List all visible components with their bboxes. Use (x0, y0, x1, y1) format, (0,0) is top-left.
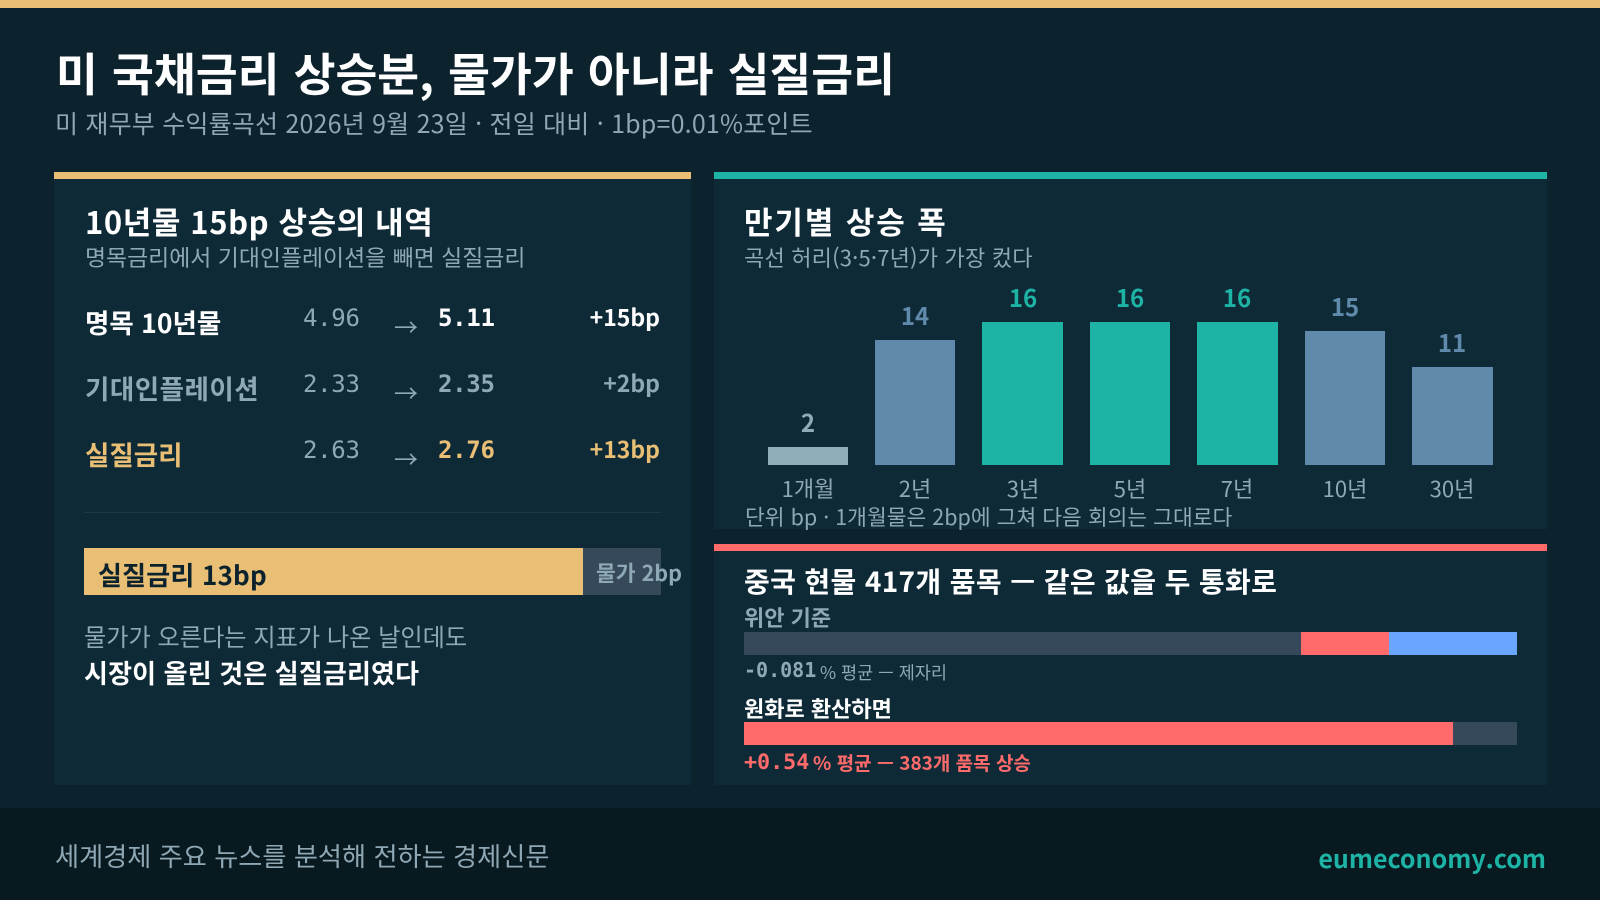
falling segment (1301, 632, 1389, 655)
category labels: 7년 (1221, 472, 1253, 504)
row: real rate (85, 431, 660, 475)
subtitle: 미 재무부 수익률곡선 2026년 9월 23일 · 전일 대비 · 1bp=0.01%포인트 (55, 105, 813, 141)
bar 2년 (875, 340, 955, 465)
value labels: 2 (801, 404, 815, 439)
category labels: 5년 (1114, 472, 1146, 504)
row: real rate: +13bp (590, 431, 660, 465)
won bar (744, 722, 1517, 745)
category labels (782, 472, 1474, 504)
category labels: 3년 (1007, 472, 1039, 504)
yuan stat: % 평균 — 제자리 (820, 660, 947, 685)
takeaway note (84, 618, 467, 691)
row: nominal: 4.96 (303, 304, 360, 332)
category labels: 2년 (899, 472, 931, 504)
bar chart (768, 279, 1493, 504)
won label: 원화로 환산하면 (744, 692, 892, 724)
row: real rate: 2.63 (303, 436, 360, 464)
panel: maturity chart (714, 172, 1547, 529)
row: nominal: 명목 10년물 (85, 302, 221, 341)
brand: eumeconomy.com (1318, 840, 1546, 876)
top accent bar (0, 0, 1600, 8)
bar 7년 (1197, 322, 1278, 465)
real rate label: 실질금리 13bp (98, 556, 267, 593)
title: 미 국채금리 상승분, 물가가 아니라 실질금리 (56, 39, 895, 105)
category labels: 30년 (1430, 472, 1474, 504)
panel subheading: 곡선 허리(3·5·7년)가 가장 컸다 (744, 241, 1033, 273)
footer tagline: 세계경제 주요 뉴스를 분석해 전하는 경제신문 (55, 836, 549, 874)
takeaway note: 물가가 오른다는 지표가 나온 날인데도 (84, 618, 467, 653)
category labels: 1개월 (782, 472, 834, 504)
panel heading: 중국 현물 417개 품목 — 같은 값을 두 통화로 (744, 561, 1277, 601)
bar 10년 (1305, 331, 1385, 465)
red segment (744, 722, 1453, 745)
panel: China spot goods (714, 544, 1547, 785)
row: inflation expectation: 2.33 (303, 370, 360, 398)
bar 1개월 (768, 447, 848, 465)
panel heading: 10년물 15bp 상승의 내역 (85, 198, 433, 243)
footer (0, 808, 1600, 900)
bar 5년 (1090, 322, 1170, 465)
panel accent (714, 172, 1547, 179)
category labels: 10년 (1323, 472, 1367, 504)
panel: 10-year breakdown (54, 172, 691, 785)
yuan bar (744, 632, 1517, 655)
chart footnote: 단위 bp · 1개월물은 2bp에 그쳐 다음 회의는 그대로다 (745, 501, 1232, 532)
row: nominal (85, 299, 660, 343)
panel accent (714, 544, 1547, 551)
value labels: 16 (1116, 279, 1144, 314)
inflation segment (583, 548, 661, 595)
row: real rate: 2.76 (438, 436, 495, 464)
row: inflation expectation: 기대인플레이션 (85, 368, 259, 407)
takeaway note: 시장이 올린 것은 실질금리였다 (84, 654, 419, 691)
yuan stat: -0.081 (744, 658, 816, 682)
panel accent (54, 172, 691, 179)
row: nominal: +15bp (590, 299, 660, 333)
value labels (801, 279, 1466, 439)
value labels: 15 (1331, 288, 1359, 323)
bar 30년 (1412, 367, 1493, 465)
value labels: 11 (1438, 324, 1466, 359)
won stat: +0.54 (744, 750, 809, 775)
value labels: 16 (1009, 279, 1037, 314)
row: nominal: 5.11 (438, 304, 495, 332)
yuan label: 위안 기준 (744, 601, 831, 633)
row: real rate: 실질금리 (85, 434, 183, 473)
row: nominal: → (394, 308, 418, 343)
yuan stat (744, 658, 947, 685)
row: inflation expectation: +2bp (603, 365, 660, 399)
won stat: % 평균 — 383개 품목 상승 (813, 749, 1031, 776)
row: inflation expectation (85, 365, 660, 409)
bar 3년 (982, 322, 1063, 465)
inflation label: 물가 2bp (596, 557, 682, 588)
panel heading: 만기별 상승 폭 (744, 198, 948, 243)
value labels: 16 (1223, 279, 1251, 314)
row: inflation expectation: → (394, 374, 418, 409)
panel subheading: 명목금리에서 기대인플레이션을 빼면 실질금리 (85, 239, 525, 273)
real rate segment (84, 548, 583, 595)
row: real rate: → (394, 440, 418, 475)
row: inflation expectation: 2.35 (438, 370, 495, 398)
rising segment (1389, 632, 1517, 655)
value labels: 14 (901, 297, 929, 332)
stacked bar: composition (84, 548, 682, 595)
